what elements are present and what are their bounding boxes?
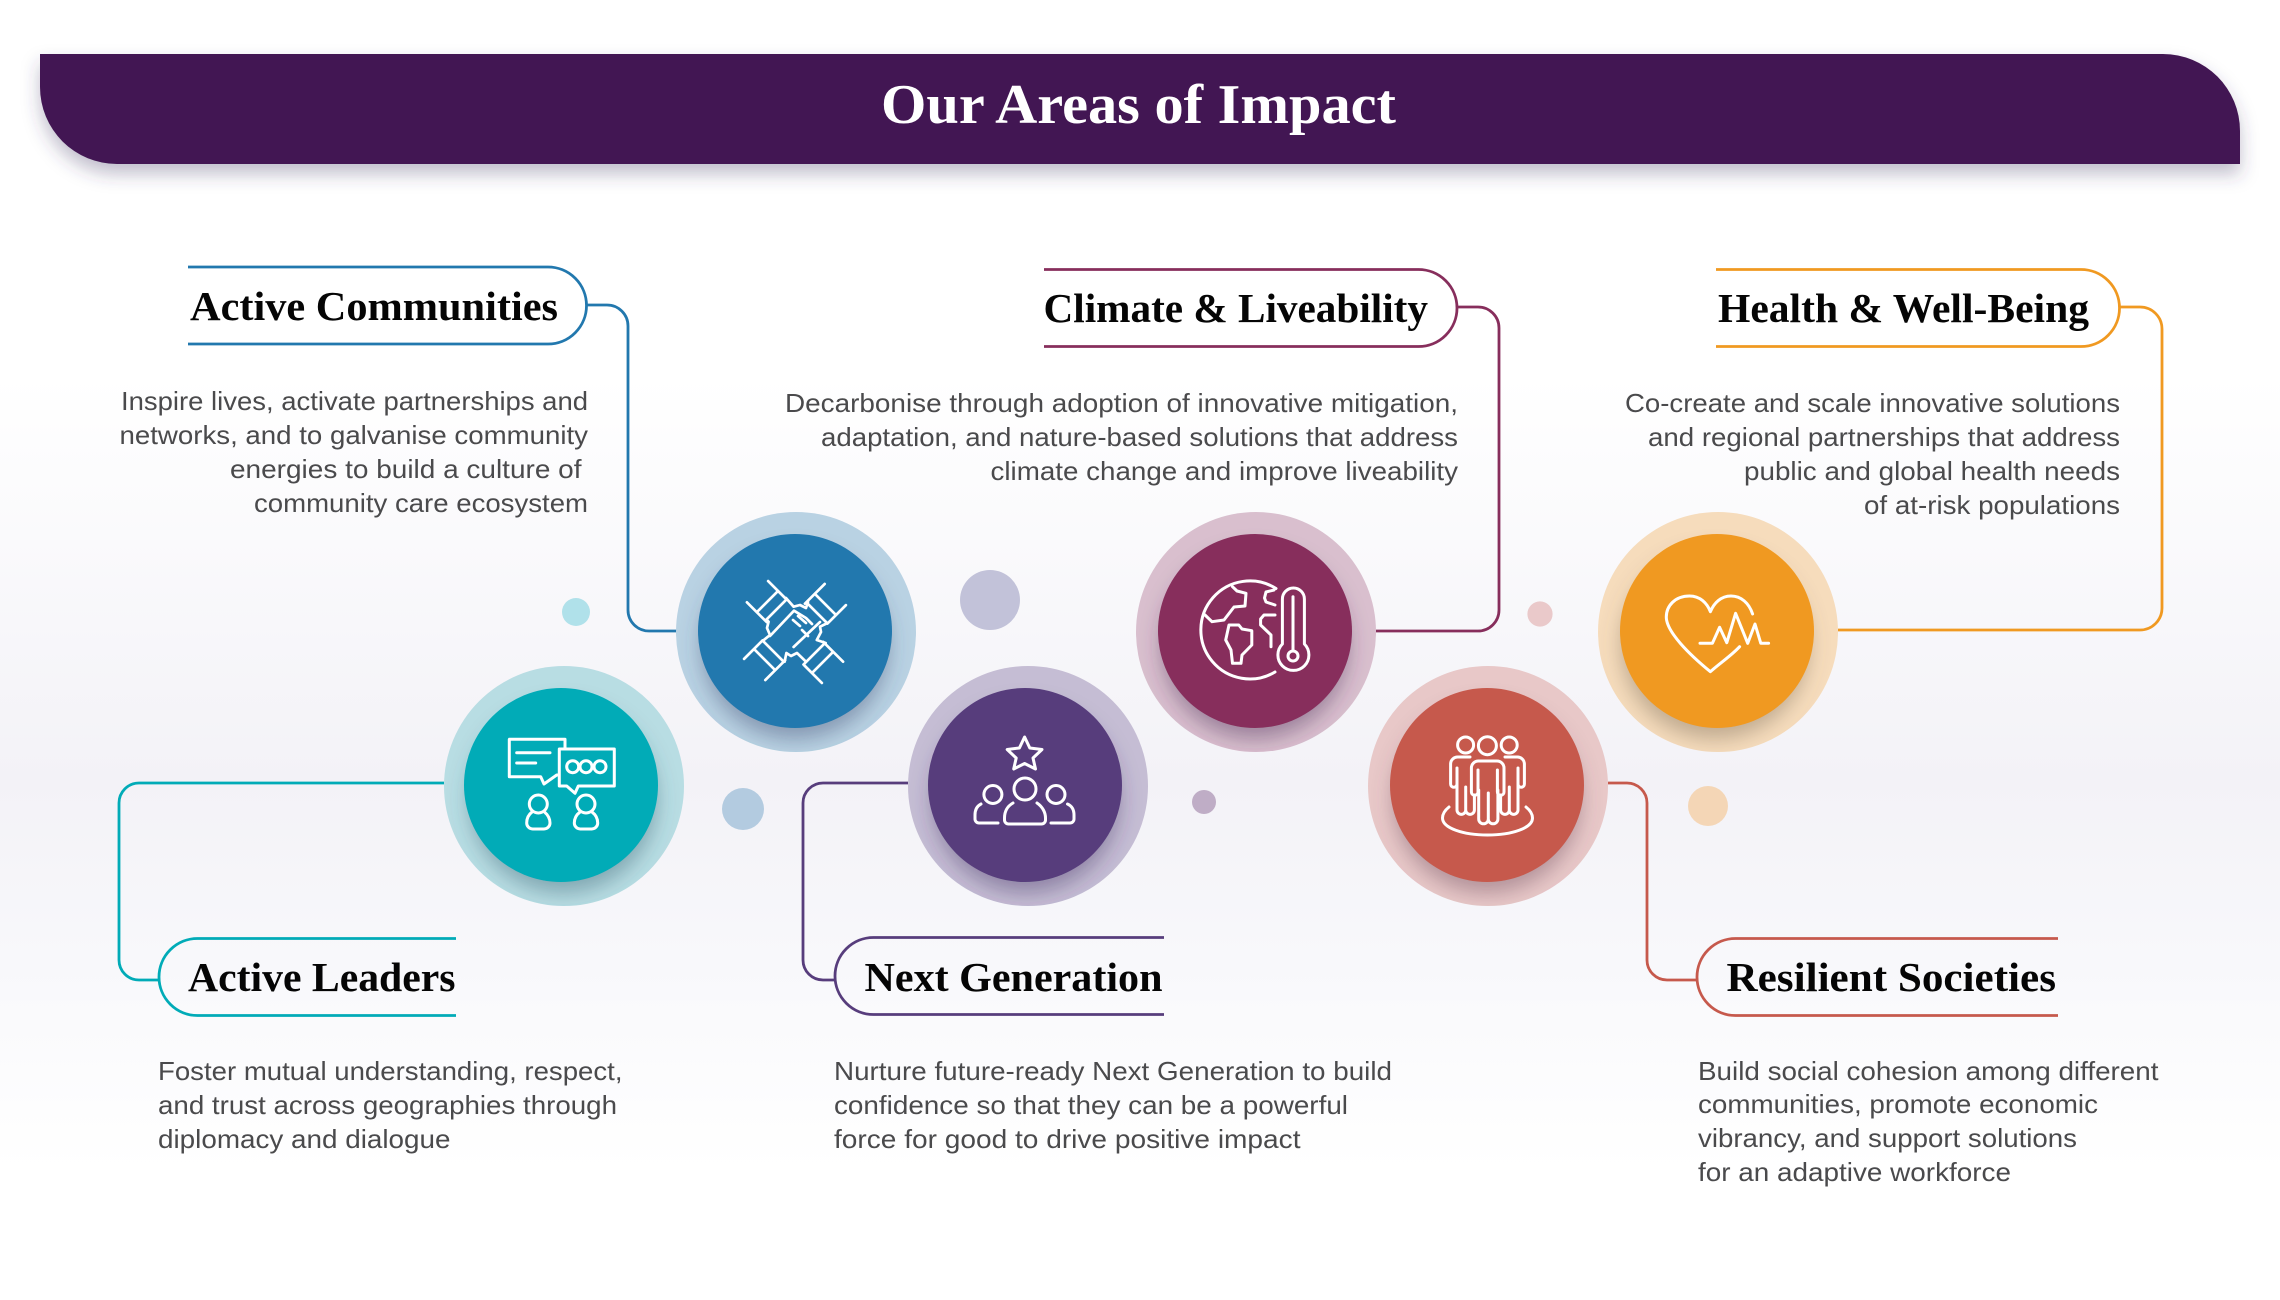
title: Our Areas of Impact [881, 74, 1396, 136]
description: Health & Well-Being: and regional partnerships that address [1648, 422, 2120, 452]
description: Active Leaders: and trust across geographies through [158, 1090, 617, 1120]
header banner [40, 54, 2240, 164]
description: Next Generation [834, 1056, 1392, 1154]
description: Active Leaders [158, 1056, 622, 1154]
description: Climate & Liveability: adaptation, and nature-based solutions that address [821, 422, 1458, 452]
badge: Next Generation [908, 666, 1148, 906]
heading: Next Generation: Next Generation [864, 954, 1163, 1000]
heading: Climate & Liveability [1044, 270, 1457, 346]
heading: Climate & Liveability: Climate & Liveability [1044, 285, 1428, 331]
badge: Active Communities [676, 512, 916, 752]
heading: Resilient Societies: Resilient Societies [1726, 954, 2056, 1000]
description: Resilient Societies: Build social cohesion among different [1698, 1056, 2159, 1086]
icon: heart with pulse [1666, 596, 1769, 672]
badge: Climate & Liveability [1136, 512, 1376, 752]
connector: Next Generation [803, 783, 908, 980]
heading: Next Generation [835, 938, 1164, 1014]
description: Next Generation: Nurture future-ready Next Generation to build [834, 1056, 1392, 1086]
description: Active Communities: energies to build a culture of [230, 454, 582, 484]
connector: Climate & Liveability [1376, 307, 1499, 631]
panel: Health & Well-Being [1598, 270, 2162, 752]
decorative dot: peach [1688, 786, 1728, 826]
description: Climate & Liveability [785, 388, 1458, 486]
description: Active Leaders: Foster mutual understanding, respect, [158, 1056, 622, 1086]
description: Active Communities [120, 386, 588, 518]
description: Active Communities: Inspire lives, activate partnerships and [121, 386, 588, 416]
description: Health & Well-Being: public and global health needs [1744, 456, 2120, 486]
description: Health & Well-Being [1625, 388, 2120, 520]
badge: Health & Well-Being [1598, 512, 1838, 752]
heading: Active Communities: Active Communities [190, 283, 558, 329]
description: Health & Well-Being: Co-create and scale innovative solutions [1625, 388, 2120, 418]
panel: Active Communities [120, 267, 916, 752]
panel: Active Leaders [119, 666, 684, 1154]
decorative dot: lavender [960, 570, 1020, 630]
description: Resilient Societies: for an adaptive workforce [1698, 1157, 2011, 1187]
description: Next Generation: force for good to drive positive impact [834, 1124, 1301, 1154]
description: Resilient Societies: communities, promote economic [1698, 1089, 2098, 1119]
description: Active Leaders: diplomacy and dialogue [158, 1124, 450, 1154]
heading: Health & Well-Being [1716, 270, 2120, 346]
badge: Active Leaders [444, 666, 684, 906]
icon: community group [1442, 737, 1532, 835]
description: Active Communities: community care ecosystem [254, 488, 588, 518]
description: Next Generation: confidence so that they can be a powerful [834, 1090, 1348, 1120]
heading: Active Leaders: Active Leaders [188, 954, 456, 1000]
description: Climate & Liveability: Decarbonise through adoption of innovative mitigation, [785, 388, 1458, 418]
banner shape [40, 54, 2240, 164]
heading: Health & Well-Being: Health & Well-Being [1718, 285, 2089, 331]
connector: Active Leaders [119, 783, 444, 980]
description: Climate & Liveability: climate change and improve liveability [990, 456, 1458, 486]
description: Active Communities: networks, and to galvanise community [120, 420, 588, 450]
panel: Resilient Societies [1368, 666, 2159, 1187]
decorative dot: pink [1527, 601, 1553, 627]
description: Resilient Societies [1698, 1056, 2159, 1187]
decorative dot: teal [562, 598, 590, 626]
heading: Resilient Societies [1697, 938, 2058, 1016]
description: Health & Well-Being: of at-risk populations [1864, 490, 2120, 520]
connector: Resilient Societies [1608, 783, 1697, 980]
panel: Climate & Liveability [785, 270, 1499, 752]
icon: people and star [975, 737, 1074, 824]
connector: Health & Well-Being [1838, 307, 2162, 630]
badge: Resilient Societies [1368, 666, 1608, 906]
panel: Next Generation [803, 666, 1392, 1154]
description: Resilient Societies: vibrancy, and support solutions [1698, 1123, 2077, 1153]
icon: joined hands [744, 581, 846, 683]
heading: Active Communities [188, 267, 586, 344]
heading: Active Leaders [159, 938, 456, 1016]
icon: globe and thermometer [1201, 581, 1309, 679]
connector: Active Communities [587, 305, 677, 631]
icon: dialogue bubbles [509, 739, 614, 829]
decorative dot: blue [722, 788, 764, 830]
decorative dot: purple [1192, 790, 1216, 814]
